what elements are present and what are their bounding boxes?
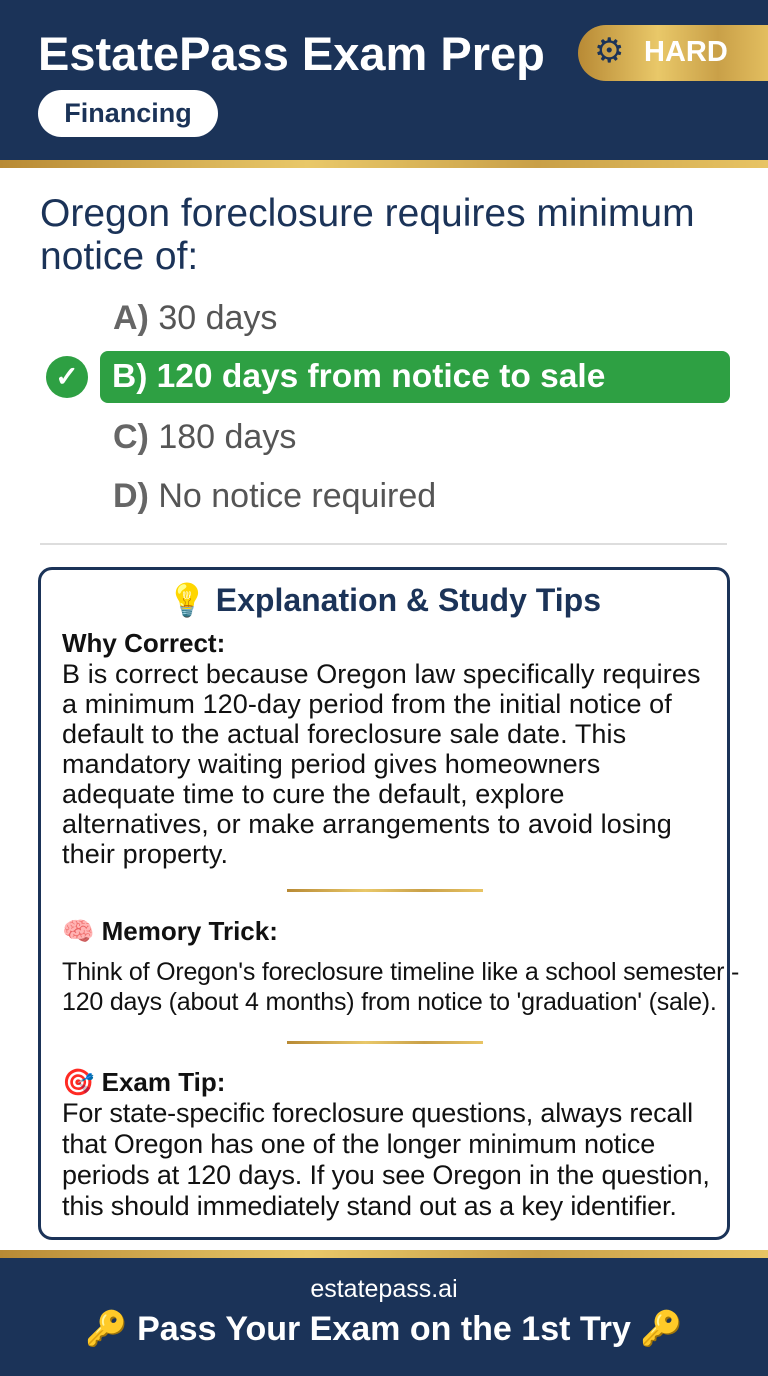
category pill [38, 90, 218, 137]
category pill: Financing [64, 98, 192, 128]
memory trick: Think of Oregon's foreclosure timeline like a school semester - [62, 958, 739, 986]
exam tip [62, 1067, 710, 1221]
why correct: mandatory waiting period gives homeowners [62, 749, 600, 779]
icon: check [46, 356, 88, 398]
why correct: adequate time to cure the default, explore [62, 779, 565, 809]
option A: A) 30 days [113, 299, 277, 337]
website: estatepass.ai [310, 1275, 458, 1303]
option D: D) No notice required [113, 477, 436, 515]
badge: HARD [578, 25, 768, 81]
icon: gear: ⚙ [594, 32, 624, 70]
exam tip: this should immediately stand out as a key identifier. [62, 1191, 677, 1221]
exam tip: that Oregon has one of the longer minimum notice [62, 1129, 655, 1159]
memory trick [62, 916, 739, 1016]
footer [0, 1258, 768, 1376]
correct option B [46, 351, 730, 403]
why correct [62, 628, 701, 869]
exam tip: 🎯 Exam Tip: [62, 1067, 225, 1097]
why correct: alternatives, or make arrangements to avoid losing [62, 809, 672, 839]
question: notice of: [40, 235, 198, 278]
tagline: 🔑 Pass Your Exam on the 1st Try 🔑 [85, 1310, 683, 1348]
memory trick: 120 days (about 4 months) from notice to 'graduation' (sale). [62, 988, 717, 1016]
question [40, 192, 695, 278]
why correct: a minimum 120-day period from the initial notice of [62, 689, 672, 719]
panel: explanation [38, 567, 730, 1240]
badge: HARD: HARD [644, 36, 728, 68]
exam tip: periods at 120 days. If you see Oregon in the question, [62, 1160, 710, 1190]
icon: check: ✓ [55, 361, 79, 392]
panel heading: 💡 Explanation & Study Tips [167, 582, 601, 618]
option C: C) 180 days [113, 418, 296, 456]
why correct: Why Correct: [62, 628, 225, 658]
exam tip: For state-specific foreclosure questions, always recall [62, 1098, 693, 1128]
correct option B: B) 120 days from notice to sale [112, 358, 605, 395]
why correct: default to the actual foreclosure sale date. This [62, 719, 626, 749]
memory trick: 🧠 Memory Trick: [62, 916, 278, 946]
why correct: B is correct because Oregon law specifically requires [62, 659, 701, 689]
why correct: their property. [62, 839, 228, 869]
question: Oregon foreclosure requires minimum [40, 192, 695, 235]
header [0, 0, 768, 160]
title: EstatePass Exam Prep [38, 27, 545, 80]
